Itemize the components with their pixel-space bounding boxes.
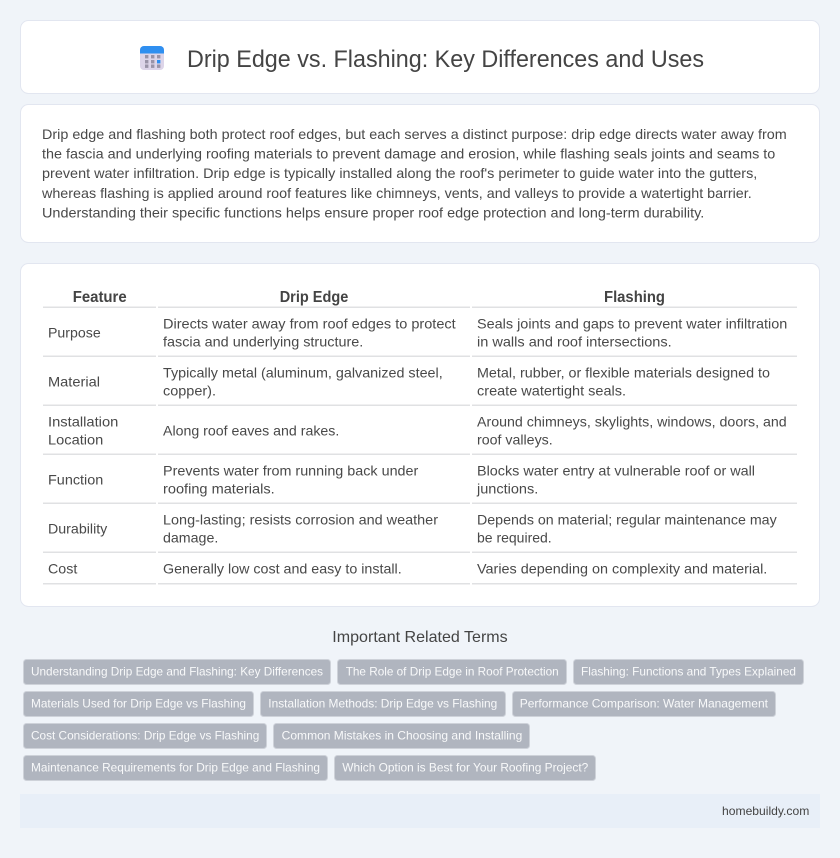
table row: material [43, 364, 797, 406]
table row: durability: Long-lasting; resists corrosion and weather [163, 512, 438, 528]
table row: cost: Varies depending on complexity and material. [477, 560, 767, 576]
tag: Materials Used for Drip Edge vs Flashing [31, 697, 246, 711]
tag [24, 660, 330, 684]
table header row: Feature [73, 289, 127, 306]
table row: function: junctions. [476, 480, 538, 496]
table row: purpose: in walls and roof intersections. [477, 334, 672, 350]
table row: function: Prevents water from running back under [163, 462, 419, 478]
intro paragraph [41, 126, 787, 220]
intro paragraph: the fascia and underlying roofing materials to prevent damage and erosion, while flashing seals joints and seams to [42, 146, 776, 162]
table row: function: Blocks water entry at vulnerable roof or wall [477, 462, 755, 478]
table row: durability: damage. [163, 530, 218, 546]
table row: cost: Cost [48, 560, 77, 576]
table row: durability: Durability [48, 520, 107, 536]
table header row [43, 289, 797, 308]
table row: material: copper). [163, 382, 216, 398]
heading: important related terms: Important Related Terms [332, 629, 508, 646]
table row: cost [43, 560, 797, 584]
tag [334, 756, 596, 780]
table row: installation location: Along roof eaves and rakes. [163, 422, 339, 438]
tag [24, 724, 266, 748]
table row: durability: be required. [477, 530, 552, 546]
table row: purpose: Seals joints and gaps to prevent water infiltration [477, 316, 787, 332]
tag [512, 692, 776, 716]
tag [260, 692, 506, 716]
tag: Common Mistakes in Choosing and Installing [282, 729, 522, 743]
table header row: Drip Edge [280, 289, 348, 306]
table row: function: Function [48, 472, 103, 488]
intro paragraph: Drip edge and flashing both protect roof edges, but each serves a distinct purpose: drip edge directs water away from [42, 126, 787, 142]
tag [274, 724, 530, 748]
table row: function [43, 462, 797, 504]
table header row: Flashing [604, 289, 665, 306]
tag [24, 692, 254, 716]
table row: installation location [43, 414, 797, 455]
header panel [20, 20, 820, 94]
footer [20, 794, 820, 828]
table row: installation location: Location [48, 432, 103, 448]
table row: material: Material [48, 374, 100, 390]
icon: calendar [140, 46, 164, 70]
table row: material: Metal, rubber, or flexible materials designed to [477, 364, 770, 380]
table row: installation location: Around chimneys, skylights, windows, doors, and [477, 414, 787, 430]
tag: Performance Comparison: Water Management [520, 697, 769, 711]
title: Drip Edge vs. Flashing: Key Differences and Uses [187, 46, 704, 73]
table row: installation location: roof valleys. [477, 432, 553, 448]
tag: Cost Considerations: Drip Edge vs Flashing [31, 729, 259, 743]
table row: function: roofing materials. [163, 480, 275, 496]
tag: Flashing: Functions and Types Explained [581, 665, 796, 679]
table row: purpose: Purpose [48, 324, 101, 340]
intro paragraph: prevent water infiltration. Drip edge is typically installed along the roof's perimeter to guide water into the gutters, [42, 165, 757, 181]
tag [338, 660, 566, 684]
panel: introduction [20, 104, 820, 242]
table row: material: Typically metal (aluminum, galvanized steel, [163, 364, 443, 380]
footer source text: homebuildy.com [722, 804, 809, 818]
table row: durability: Depends on material; regular maintenance may [477, 512, 777, 528]
table row: installation location: Installation [48, 414, 118, 430]
tag: Which Option is Best for Your Roofing Project? [342, 761, 589, 775]
tag: Installation Methods: Drip Edge vs Flashing [268, 697, 497, 711]
related terms tags [24, 660, 804, 780]
table row: purpose: fascia and underlying structure. [163, 334, 363, 350]
table row: durability [43, 512, 797, 553]
intro paragraph: whereas flashing is applied around roof features like chimneys, vents, and valleys to provide a watertight barrier. [41, 185, 752, 201]
tag [574, 660, 804, 684]
table row: purpose [43, 316, 797, 357]
tag: Understanding Drip Edge and Flashing: Key Differences [31, 665, 323, 679]
tag: Maintenance Requirements for Drip Edge and Flashing [31, 761, 320, 775]
tag [24, 756, 328, 780]
table row: material: create watertight seals. [477, 382, 626, 398]
table row: cost: Generally low cost and easy to install. [163, 560, 402, 576]
tag: The Role of Drip Edge in Roof Protection [346, 665, 559, 679]
intro paragraph: Understanding their specific functions helps ensure proper roof edge protection and long-term durability. [42, 204, 704, 220]
panel: comparison table [20, 264, 820, 606]
table row: purpose: Directs water away from roof edges to protect [163, 316, 456, 332]
